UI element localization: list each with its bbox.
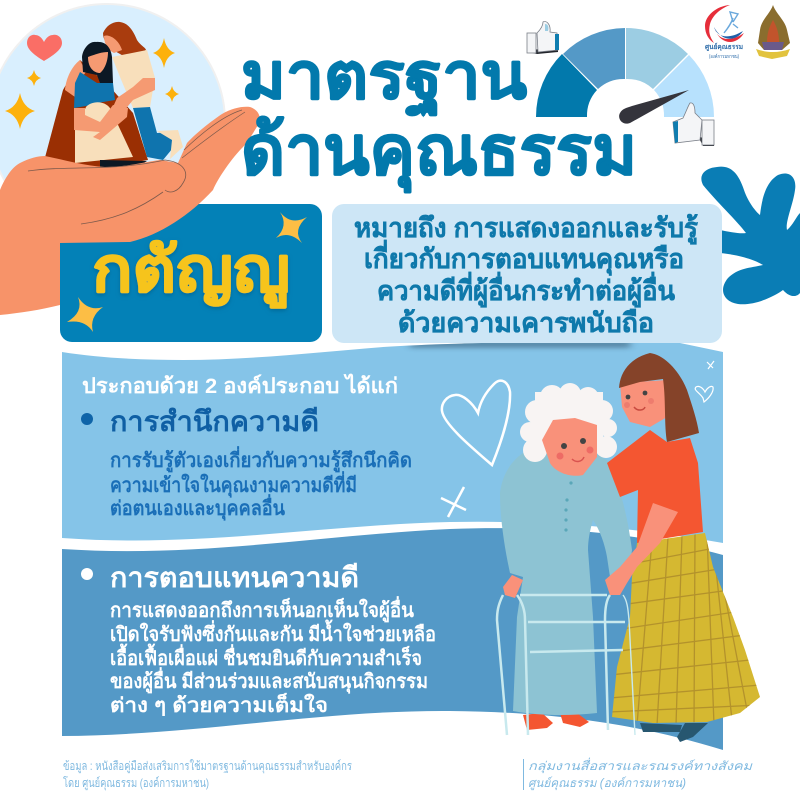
logo: moral center: ศูนย์คุณธรรม [705, 42, 743, 52]
panel: definition: หมายถึง การแสดงออกและรับรู้ [354, 213, 698, 245]
body: ต่อตนเองและบุคคลอื่น [110, 493, 285, 521]
skirt [612, 533, 760, 723]
bullet [81, 413, 93, 425]
icon: thumbs up right [673, 103, 714, 146]
hair [619, 353, 699, 442]
body: เอื้อเฟื้อเผื่อแผ่ ชื่นชมยินดีกับความสำเร็จ [110, 643, 422, 670]
dress [500, 445, 632, 715]
icon: heart [27, 35, 62, 61]
light blue circle [0, 4, 225, 240]
icon: thumbs up left [527, 21, 559, 54]
body: การรับรู้ตัวเองเกี่ยวกับความรู้สึกนึกคิด [110, 445, 412, 474]
decorative hearts and crosses [441, 361, 714, 517]
buttons [564, 481, 573, 532]
panel: keyword [60, 204, 322, 342]
head [620, 380, 667, 427]
shoes [640, 723, 682, 732]
heading: การสำนึกความดี [110, 406, 319, 437]
title: ด้านคุณธรรม [241, 113, 637, 193]
bullet [81, 568, 93, 580]
title: มาตรฐาน [241, 40, 527, 117]
arm [605, 503, 678, 595]
body: ความเข้าใจในคุณงามความดีที่มี [110, 470, 357, 498]
face [542, 418, 597, 476]
icon: sparkle bottom left [67, 297, 103, 332]
illustration: hand holding two women [0, 4, 260, 315]
intro line: ประกอบด้วย 2 องค์ประกอบ ได้แก่ [82, 373, 398, 398]
walker [497, 595, 635, 735]
elderly woman [500, 383, 632, 730]
left hand [503, 575, 523, 598]
body [110, 595, 436, 717]
source credit: โดย ศูนย์คุณธรรม (องค์การมหาชน) [63, 776, 209, 791]
body: การแสดงออกถึงการเห็นอกเห็นใจผู้อื่น [110, 595, 414, 624]
illustration: elderly woman with walker and caregiver [497, 353, 760, 742]
decorative blue splash [701, 167, 800, 304]
keyword text: กตัญญู [92, 236, 290, 308]
awareness content [81, 373, 412, 521]
logo: emblem [756, 5, 790, 59]
feet [523, 713, 553, 730]
title [241, 40, 637, 193]
icon: sparkle top right [276, 212, 307, 243]
panel: awareness background [62, 342, 723, 543]
hair [520, 383, 617, 462]
body: ของผู้อื่น มีส่วนร่วมและสนับสนุนกิจกรรม [110, 666, 428, 695]
panel: definition: เกี่ยวกับการตอบแทนคุณหรือ [364, 239, 684, 276]
panel: definition [332, 204, 722, 348]
shirt [607, 430, 703, 543]
panel: repayment background [62, 528, 723, 750]
heading: การตอบแทนความดี [110, 562, 359, 593]
caregiver [605, 353, 760, 742]
divider and department credit: กลุ่มงานสื่อสารและรณรงค์ทางสังคม [528, 757, 753, 774]
logo: moral center [705, 5, 744, 60]
needle [619, 90, 689, 124]
body: เปิดใจรับฟังซึ่งกันและกัน มีน้ำใจช่วยเหลือ [110, 619, 436, 646]
source credit [63, 759, 352, 791]
logo: moral center: (องค์การมหาชน) [709, 53, 739, 60]
divider and department credit [523, 757, 753, 791]
women [43, 60, 148, 168]
hand [0, 107, 260, 315]
repayment content [81, 562, 436, 717]
panel: definition: ด้วยความเคารพนับถือ [398, 308, 654, 338]
panel: definition: ความดีที่ผู้อื่นกระทำต่อผู้อื่น [377, 271, 676, 308]
body: ต่าง ๆ ด้วยความเต็มใจ [110, 692, 328, 717]
source credit: ข้อมูล : หนังสือคู่มือส่งเสริมการใช้มาตรฐานด้านคุณธรรมสำหรับองค์กร [63, 759, 352, 774]
divider and department credit: ศูนย์คุณธรรม (องค์การมหาชน) [528, 776, 686, 791]
gauge [527, 21, 714, 146]
body [110, 445, 412, 521]
icons: sparkles [5, 38, 179, 129]
